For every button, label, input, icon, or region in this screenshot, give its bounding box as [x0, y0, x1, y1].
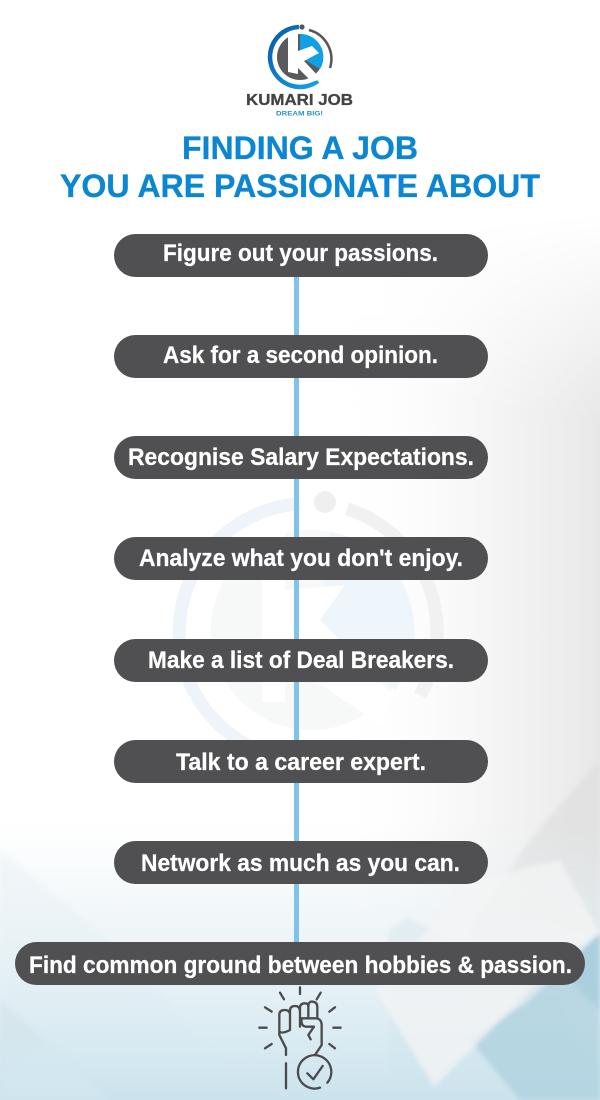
step 1: Figure out your passions.	[163, 240, 438, 267]
logo	[246, 24, 353, 117]
brand name: KUMARI JOB	[246, 92, 353, 109]
step 4: Analyze what you don't enjoy.	[139, 545, 463, 572]
step 5: Make a list of Deal Breakers.	[148, 647, 454, 674]
tagline: DREAM BIG!	[276, 110, 323, 118]
step 6	[114, 740, 488, 783]
icon check circle	[298, 1055, 331, 1089]
logo mark	[270, 24, 331, 87]
step 2	[114, 335, 488, 378]
step 2: Ask for a second opinion.	[163, 342, 438, 369]
title: FINDING A JOB	[182, 130, 418, 166]
step 7: Network as much as you can.	[141, 850, 460, 877]
step 6: Talk to a career expert.	[176, 749, 426, 776]
step 5	[114, 639, 488, 682]
step 1	[114, 234, 488, 277]
connector line	[294, 270, 299, 950]
step 8: Find common ground between hobbies & passion.	[29, 952, 572, 979]
icon: raised fist with check	[259, 987, 341, 1089]
title	[60, 130, 540, 204]
title: YOU ARE PASSIONATE ABOUT	[60, 168, 540, 204]
step 4	[114, 537, 488, 580]
step 7	[114, 841, 488, 884]
icon rays	[259, 987, 341, 1048]
step 8	[15, 942, 585, 985]
step 3: Recognise Salary Expectations.	[128, 444, 474, 471]
step 3	[114, 436, 488, 479]
watermark logo	[179, 491, 437, 760]
icon wrist line	[282, 1063, 289, 1088]
icon fist	[279, 1002, 322, 1055]
